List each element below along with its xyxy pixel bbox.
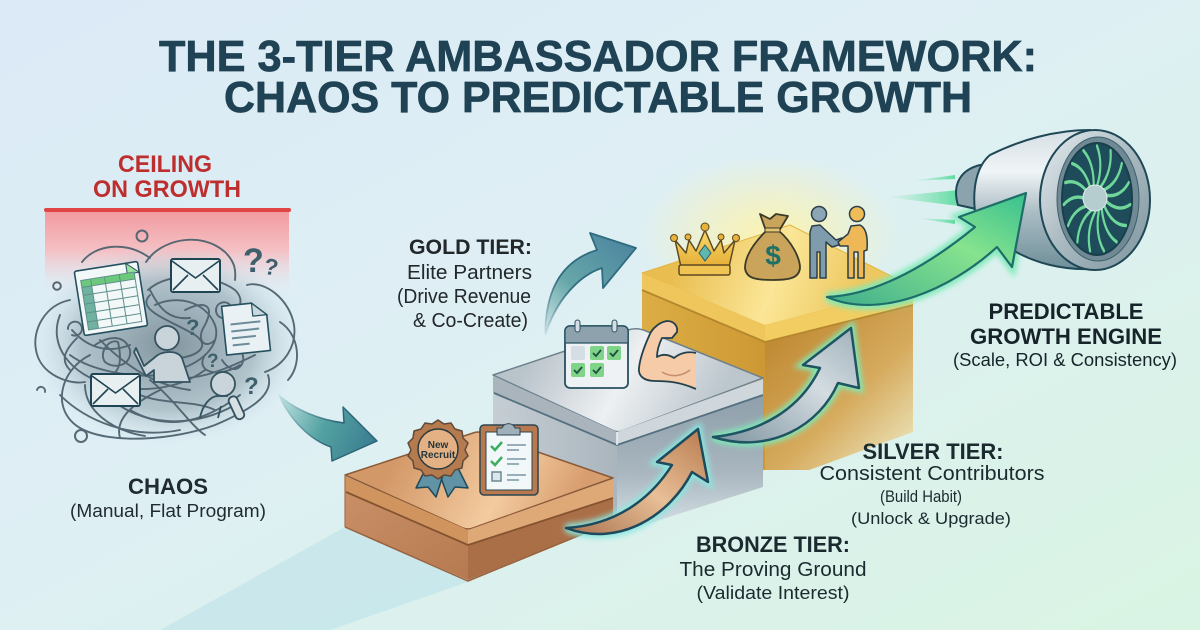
- silver block: [493, 329, 763, 536]
- panel: silver step: [493, 329, 763, 536]
- label: predictable growth engine: GROWTH ENGINE: [970, 324, 1162, 349]
- label: gold tier: [397, 236, 532, 332]
- icon: crown: [670, 223, 740, 275]
- icon: question marks: ?: [207, 351, 219, 372]
- label: silver tier: Consistent Contributors: [820, 463, 1044, 485]
- icon: question marks: ?: [243, 242, 264, 280]
- icon: spreadsheet: [74, 261, 148, 336]
- icon: question marks: ?: [262, 253, 280, 281]
- label: gold tier: Elite Partners: [407, 262, 532, 284]
- label: chaos: CHAOS: [128, 474, 208, 499]
- icon: handshake people: [810, 206, 867, 278]
- gold block: [642, 225, 913, 470]
- label: predictable growth engine: PREDICTABLE: [988, 299, 1144, 324]
- icon: new recruit badge: [408, 420, 468, 497]
- panel: bronze step: [345, 432, 613, 581]
- arrow: chaos to bronze: [278, 394, 377, 461]
- panel: gold step: [640, 155, 913, 470]
- icon: question marks: [186, 242, 280, 400]
- heading: ceiling on growth: CEILING: [118, 151, 212, 178]
- icon: envelope top: [171, 259, 220, 292]
- label: silver tier: [820, 439, 1044, 528]
- icon: envelope bottom: [91, 374, 140, 406]
- label: chaos: [70, 474, 266, 521]
- label: bronze tier: [680, 532, 866, 603]
- label: gold tier: GOLD TIER:: [409, 236, 532, 259]
- bronze block: [345, 432, 613, 581]
- icon: document: [222, 302, 270, 355]
- title: CHAOS TO PREDICTABLE GROWTH: [224, 73, 972, 122]
- icon: flexed arm: [639, 321, 696, 389]
- label: silver tier: (Unlock & Upgrade): [851, 509, 1011, 528]
- tangled scribbles: [33, 230, 303, 445]
- arrow: growth arrow: [827, 193, 1026, 305]
- icon: clipboard checklist: [480, 424, 538, 495]
- title: [159, 32, 1037, 122]
- label: bronze tier: The Proving Ground: [680, 559, 866, 581]
- icon: person with magnifier: [200, 372, 246, 421]
- icon: jet engine: [956, 130, 1150, 270]
- title: THE 3-TIER AMBASSADOR FRAMEWORK:: [159, 32, 1037, 81]
- label: gold tier: & Co-Create): [413, 310, 528, 332]
- arrow: toward gold: [545, 233, 636, 337]
- label: predictable growth engine: [953, 299, 1177, 370]
- label: bronze tier: (Validate Interest): [696, 583, 850, 603]
- label: predictable growth engine: (Scale, ROI & Consistency): [953, 350, 1177, 370]
- icon: habit calendar: [565, 320, 628, 388]
- icon: new recruit badge: New: [428, 440, 449, 451]
- icon: question marks: ?: [244, 373, 259, 400]
- icon: money bag: $: [765, 240, 781, 271]
- panel: chaos: [33, 151, 303, 521]
- icon: confused person: [134, 326, 190, 382]
- label: silver tier: SILVER TIER:: [862, 439, 1004, 464]
- arrow: silver to gold: [713, 328, 859, 442]
- gold glow: [640, 155, 900, 315]
- arrow glow and speed lines: [827, 175, 1026, 305]
- icon: new recruit badge: Recruit: [421, 450, 456, 461]
- ceiling band: [44, 208, 291, 297]
- heading: ceiling on growth: [93, 151, 241, 203]
- label: silver tier: (Build Habit): [880, 487, 962, 506]
- floor shadow: [160, 527, 468, 630]
- label: chaos: (Manual, Flat Program): [70, 501, 266, 521]
- icon: money bag: [745, 214, 800, 280]
- heading: ceiling on growth: ON GROWTH: [93, 176, 241, 203]
- arrow: bronze to silver: [566, 429, 708, 534]
- icon: question marks: ?: [186, 315, 199, 340]
- label: bronze tier: BRONZE TIER:: [696, 532, 850, 557]
- label: gold tier: (Drive Revenue: [397, 286, 531, 308]
